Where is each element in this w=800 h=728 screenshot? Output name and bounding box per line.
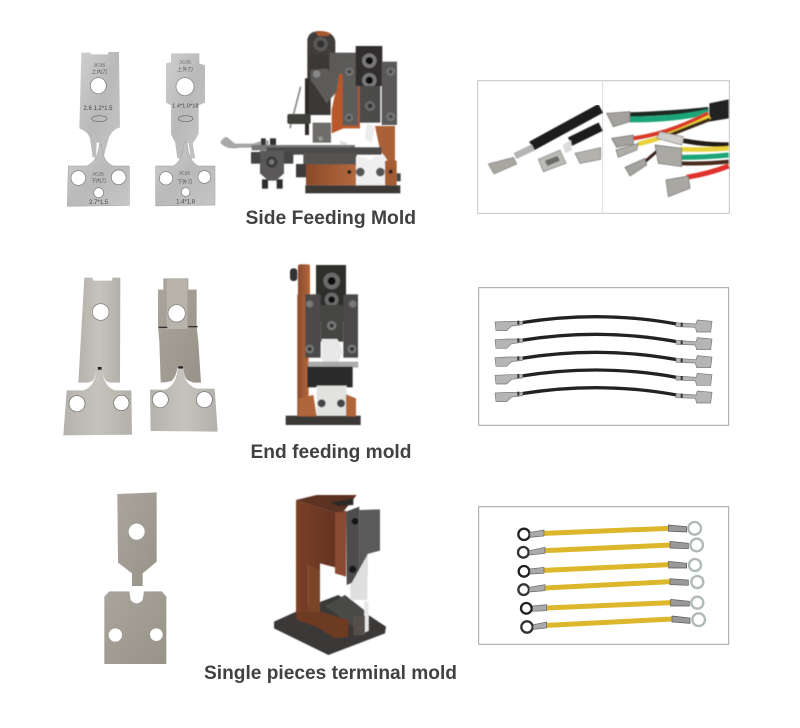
heading: end feeding mold: End feeding mold bbox=[250, 441, 412, 463]
wire with terminals 2 bbox=[495, 334, 712, 350]
yellow wire 2 bbox=[518, 539, 703, 558]
blade: lower knife E bbox=[104, 591, 166, 664]
blade: upper knife B: 1.4*1.0*18 bbox=[172, 103, 199, 109]
blade: lower knife A: 2.7*1.5 bbox=[89, 200, 109, 206]
blade: upper knife A: 2.6 1.2*1.5 bbox=[84, 106, 113, 112]
row 3: single piece mold blades bbox=[104, 492, 386, 664]
wire with terminals 1 bbox=[495, 317, 712, 332]
blade: lower knife A: 下内刀 bbox=[91, 178, 106, 185]
yellow wire 3 bbox=[519, 559, 701, 577]
blade: lower knife B bbox=[156, 143, 215, 206]
heading: single pieces terminal mold: Single pieces terminal mold bbox=[204, 662, 457, 684]
panel: ring terminal product photo bbox=[479, 507, 729, 644]
wire with terminals 3 bbox=[495, 352, 712, 368]
yellow wire 1 bbox=[518, 522, 701, 540]
blade: lower knife B: 1.4*1.8 bbox=[176, 199, 196, 205]
blade: upper knife A: 上内刀 bbox=[91, 67, 107, 75]
machine: side feeding applicator bbox=[221, 31, 401, 193]
blade: upper knife E bbox=[117, 492, 157, 586]
panel: end feeding product photo bbox=[479, 288, 729, 425]
heading: side feeding mold: Side Feeding Mold bbox=[246, 207, 416, 229]
yellow wire 4 bbox=[518, 576, 703, 595]
wire with terminals 4 bbox=[495, 370, 712, 385]
row 2: end feeding mold blades bbox=[63, 264, 361, 435]
photo: black wire terminals bbox=[488, 108, 601, 174]
blade: lower knife B: 下外刀 bbox=[178, 178, 192, 185]
blade: lower knife A: JC25 bbox=[92, 171, 104, 177]
blade: upper knife A: JC25 bbox=[94, 63, 105, 69]
panel: side feeding product photo bbox=[478, 81, 729, 213]
machine: end feeding applicator bbox=[286, 264, 361, 425]
blade: lower knife A bbox=[67, 145, 129, 206]
blade: upper knife B: 上外刀 bbox=[177, 65, 193, 73]
machine: single piece applicator bbox=[274, 495, 386, 655]
wire with terminals 5 bbox=[495, 388, 712, 403]
blade: lower knife D bbox=[150, 366, 218, 432]
photo: colored wire bundle bbox=[607, 99, 729, 197]
row 1: side feeding mold blades bbox=[67, 31, 401, 206]
blade: lower knife C bbox=[63, 367, 132, 435]
blade: upper knife B: JC25 bbox=[179, 60, 191, 66]
blade: upper knife C bbox=[78, 278, 120, 383]
blade: upper knife D bbox=[158, 278, 201, 383]
yellow wire 5 bbox=[521, 597, 703, 614]
blade: upper knife B bbox=[166, 53, 205, 158]
blade: lower knife B: JC25 bbox=[179, 170, 190, 176]
yellow wire 6 bbox=[521, 613, 705, 633]
blade: upper knife A bbox=[79, 52, 120, 158]
